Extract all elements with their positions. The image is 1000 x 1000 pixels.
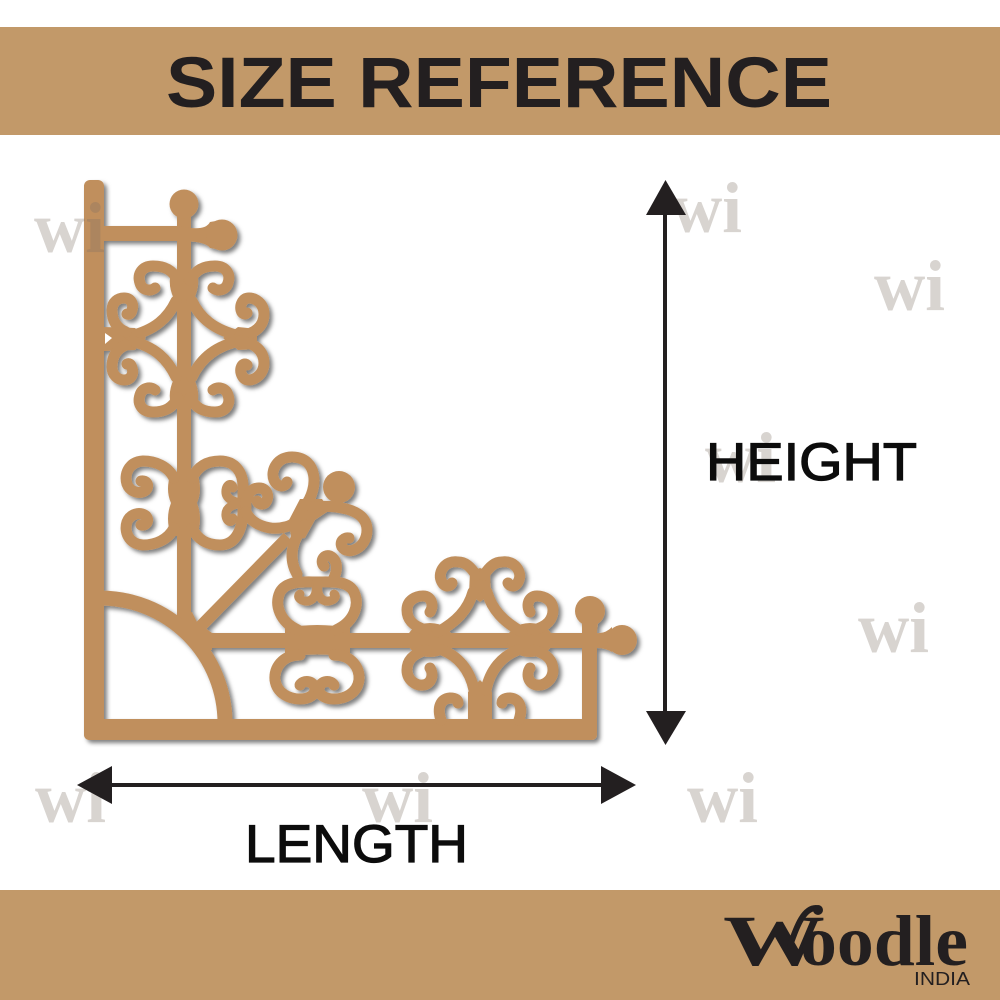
lower centre scroll ornament — [275, 582, 359, 699]
ornament: corner bracket cut-out — [84, 180, 637, 740]
frame: left bar, bottom bar, right post — [84, 180, 597, 740]
watermarks: wi — [35, 758, 106, 838]
label: height: HEIGHT — [706, 433, 917, 492]
watermarks: wi — [34, 188, 105, 268]
quarter arc and diagonal strut — [100, 537, 288, 723]
arrow: length — [77, 766, 636, 804]
title: SIZE REFERENCE — [166, 44, 832, 123]
watermarks — [34, 168, 945, 838]
footer band — [0, 890, 1000, 1000]
middle scroll ornament — [126, 457, 367, 580]
right scroll ornament — [407, 562, 553, 720]
upper scroll ornament — [104, 266, 264, 412]
logo: Woodle India: oodle — [800, 901, 968, 981]
watermarks: wi — [362, 758, 433, 838]
watermarks: wi — [874, 246, 945, 326]
logo: Woodle India — [723, 901, 970, 989]
header band — [0, 27, 1000, 135]
arrow: height — [646, 180, 686, 745]
knobs — [170, 190, 637, 655]
watermarks: wi — [705, 418, 776, 498]
watermarks: wi — [858, 588, 929, 668]
logo: Woodle India: INDIA — [914, 969, 970, 989]
logo: Woodle India: W — [723, 901, 825, 981]
label: length: LENGTH — [245, 815, 468, 874]
watermarks: wi — [671, 168, 742, 248]
watermarks: wi — [687, 758, 758, 838]
